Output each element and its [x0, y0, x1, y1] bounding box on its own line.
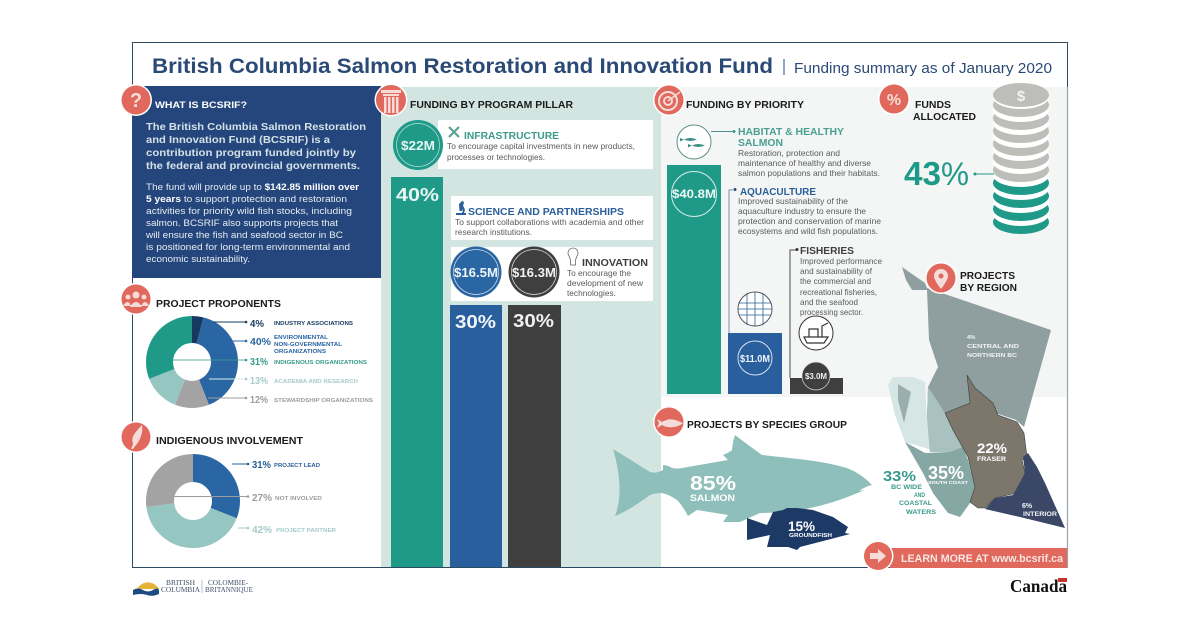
legend: environmental organizations: 40%: [250, 336, 272, 348]
legend: environmental organizations: ENVIRONMENTAL: [274, 335, 328, 341]
bar: aquaculture: $11.0M: [740, 354, 770, 365]
text: intro paragraph: contribution program funded jointly by: [146, 147, 356, 159]
icon: salmon pair: [677, 125, 711, 159]
bar: aquaculture: [728, 333, 782, 394]
icon: percent: [878, 83, 910, 115]
text: fund description: is positioned for long-term environmental and: [146, 242, 350, 252]
panel: funding by priority background: [661, 87, 1067, 397]
bar: habitat: [667, 165, 721, 394]
icon: feather: [120, 421, 152, 453]
icon: arrow: [862, 540, 894, 572]
icon: light bulb: [568, 248, 578, 265]
label: central and northern BC: CENTRAL AND: [967, 344, 1019, 350]
badge: 16.3 million: [508, 246, 560, 298]
icon: people: [120, 283, 152, 315]
chart: proponents donut: [160, 330, 224, 394]
label: fraser: 22%: [977, 440, 1008, 456]
text: aquaculture: Improved sustainability of the: [738, 196, 848, 206]
text: fisheries: Improved performance: [800, 256, 882, 266]
text: fisheries: processing sector.: [800, 307, 863, 317]
text: habitat and healthy salmon: SALMON: [738, 138, 783, 149]
bar: science 30%: [450, 305, 502, 567]
label: BC wide and coastal waters: AND: [914, 492, 925, 499]
logo: British Columbia: [133, 578, 253, 596]
heading: indigenous involvement: INDIGENOUS INVOLVEMENT: [156, 435, 304, 447]
legend: industry associations: 4%: [250, 318, 265, 330]
region: fraser: [945, 375, 1027, 508]
icon: map pin: [925, 262, 957, 294]
badge: 22 million: [393, 120, 443, 170]
text: intro paragraph: and Innovation Fund (BCSRIF) is a: [146, 134, 330, 146]
text: intro paragraph: [146, 121, 366, 172]
panel: what is BCSRIF: [120, 84, 381, 278]
label: south coast: 35%: [928, 463, 964, 483]
label: 15% groundfish: GROUNDFISH: [789, 533, 832, 539]
text: habitat and healthy salmon: HABITAT & HEALTHY: [738, 127, 844, 138]
label: 85% salmon: SALMON: [690, 493, 735, 503]
illustration: groundfish: [747, 508, 850, 550]
text: habitat and healthy salmon: salmon populations and their habitats.: [738, 168, 880, 178]
icon: fishing boat: [799, 316, 833, 350]
icon: microscope: [456, 201, 466, 215]
legend: project partner: 42%: [252, 524, 273, 536]
text: fund description: The fund will provide up to $142.85 million over: [146, 182, 360, 192]
label: 85% salmon: [690, 473, 736, 503]
heading: project proponents: PROJECT PROPONENTS: [156, 298, 281, 310]
bar: innovation 30%: 30%: [513, 311, 554, 331]
heading: what is BCSRIF: WHAT IS BCSRIF?: [155, 100, 247, 111]
text: fund description: [145, 182, 360, 264]
connector: habitat: [711, 130, 733, 132]
label: south coast: SOUTH COAST: [928, 480, 968, 485]
legend: stewardship organizations: STEWARDSHIP ORGANIZATIONS: [274, 398, 373, 404]
frame: [132, 42, 1068, 568]
legend: not involved: NOT INVOLVED: [275, 496, 322, 502]
panel: projects by region: [883, 262, 1065, 528]
panel: project proponents: [120, 283, 373, 406]
logo: Canada wordmark: Canada: [1010, 576, 1067, 596]
text: science description: research institutions.: [455, 227, 532, 237]
call to action: learn more: [862, 540, 1067, 572]
text: fund description: salmon. BCSRIF also supports projects that: [146, 218, 339, 228]
text: wordmark: COLOMBIE-: [208, 578, 248, 587]
text: infrastructure description: [447, 141, 635, 162]
icon: BC sun: [133, 582, 159, 596]
right border: [1066, 87, 1068, 567]
title: British Columbia Salmon Restoration and Innovation Fund: [152, 55, 773, 78]
label: 85% salmon: 85%: [690, 473, 736, 495]
text: innovation description: To encourage the: [567, 268, 631, 278]
text: aquaculture: protection and conservation of marine: [738, 216, 881, 226]
legend: environmental organizations: ORGANIZATIONS: [274, 349, 326, 355]
legend: academia and research: ACADEMIA AND RESEARCH: [274, 379, 358, 385]
label: 15% groundfish: 15%: [788, 518, 816, 534]
icon: target: [653, 84, 685, 116]
region: BC wide and coastal waters: [888, 377, 932, 450]
text: fisheries: [796, 245, 882, 317]
label: fraser: FRASER: [977, 457, 1007, 463]
text: aquaculture: [734, 186, 881, 236]
text: habitat and healthy salmon: Restoration, protection and: [738, 148, 840, 158]
panel: funds allocated: [878, 83, 1049, 234]
text: fund description: activities for priority wild fish stocks, including: [146, 206, 352, 216]
icon: question mark: ?: [130, 90, 142, 112]
callout: 43 percent: [904, 155, 994, 192]
badge: 16.5 million: $16.5M: [454, 265, 498, 280]
heading: projects by region: BY REGION: [960, 283, 1017, 294]
text: aquaculture: AQUACULTURE: [740, 186, 816, 198]
bar: infrastructure 40%: 40%: [396, 185, 439, 205]
text: wordmark: [161, 578, 253, 594]
panel: funding by program pillar: [374, 84, 653, 567]
text: science description: To support collaborations with academia and other: [455, 217, 644, 227]
island: Haida Gwaii: [898, 384, 911, 423]
label: BC wide and coastal waters: BC WIDE: [891, 484, 923, 491]
text: innovation description: technologies.: [567, 288, 616, 298]
icon: tools: [449, 127, 459, 137]
text: fund description: will ensure the fish and seafood sector in BC: [145, 230, 344, 240]
legend: project partner: PROJECT PARTNER: [276, 528, 337, 534]
icon: question mark: [120, 84, 152, 116]
region: interior: [985, 453, 1065, 528]
legend: stewardship organizations: [208, 394, 373, 406]
legend: indigenous organizations: 31%: [250, 356, 269, 368]
connector: aquaculture: [729, 190, 733, 333]
bar: habitat: $40.8M: [672, 189, 716, 201]
panel: funding by program pillar background: [381, 87, 661, 567]
heading: funds allocated: FUNDS: [915, 100, 951, 111]
title: infrastructure: INFRASTRUCTURE: [464, 130, 559, 142]
callout: 43 percent: %: [941, 156, 969, 192]
label: interior: 6%: [1022, 503, 1033, 510]
text: innovation description: development of new: [567, 278, 644, 288]
text: fund description: 5 years to support protection and restoration: [146, 194, 347, 204]
legend: indigenous organizations: INDIGENOUS ORGANIZATIONS: [274, 360, 367, 366]
heading: funds allocated: ALLOCATED: [913, 112, 976, 123]
icon: fish: [653, 406, 685, 438]
label: 15% groundfish: [788, 518, 832, 539]
label: central and northern BC: 4%: [967, 335, 975, 341]
connector: fisheries: [790, 250, 796, 378]
label: BC wide and coastal waters: WATERS: [906, 509, 937, 516]
legend: not involved: 27%: [252, 492, 273, 504]
panel: funding by priority: [653, 84, 882, 394]
legend: industry associations: INDUSTRY ASSOCIATIONS: [274, 321, 353, 327]
text: aquaculture: ecosystems and wild fish populations.: [738, 226, 878, 236]
badge: 22 million: $22M: [401, 138, 435, 153]
chart: coin stack: [993, 83, 1049, 234]
legend: environmental organizations: NON-GOVERNMENTAL: [274, 342, 342, 348]
text: innovation description: [567, 268, 644, 298]
region: south coast: [905, 442, 975, 517]
legend: indigenous organizations: [173, 356, 367, 368]
legend: project partner: [238, 524, 337, 536]
card: innovation: [450, 246, 653, 301]
icon: dollar sign: $: [1017, 88, 1026, 105]
heading: funding by priority: FUNDING BY PRIORITY: [686, 100, 804, 111]
legend: project lead: PROJECT LEAD: [274, 463, 320, 469]
legend: industry associations: [213, 318, 353, 330]
legend: not involved: [173, 492, 322, 504]
callout: 43 percent: 43: [904, 155, 941, 192]
badge: 16.3 million: $16.3M: [512, 265, 556, 280]
heading: funding by program pillar: FUNDING BY PROGRAM PILLAR: [410, 100, 574, 111]
label: central and northern BC: [967, 335, 1019, 359]
text: fisheries: the commercial and: [800, 276, 871, 286]
coastal inlets: [927, 387, 966, 452]
legend: academia and research: [209, 375, 358, 387]
label: fraser: [977, 440, 1008, 463]
heading: funds allocated: [913, 100, 976, 123]
label: BC wide and coastal waters: [883, 468, 937, 516]
label: central and northern BC: NORTHERN BC: [967, 353, 1018, 359]
text: infrastructure description: processes or technologies.: [447, 152, 545, 162]
icon: pillar: [374, 84, 408, 116]
label: BC wide and coastal waters: 33%: [883, 468, 916, 485]
text: fisheries: and the seafood: [800, 297, 858, 307]
legend: project lead: [232, 459, 320, 471]
text: wordmark: BRITISH: [166, 578, 196, 587]
mouth: [859, 485, 872, 491]
text: aquaculture: aquaculture industry to ensure the: [738, 206, 866, 216]
text: intro paragraph: the federal and provincial governments.: [146, 160, 360, 172]
text: wordmark: COLUMBIA: [161, 585, 201, 594]
icon: percent: %: [887, 92, 901, 109]
region: central and northern BC: [902, 267, 1051, 452]
panel: indigenous involvement: [120, 421, 337, 536]
text: fisheries: FISHERIES: [800, 245, 854, 257]
text: wordmark: BRITANNIQUE: [205, 585, 253, 594]
bar: infrastructure 40%: [391, 177, 443, 567]
title: innovation: INNOVATION: [582, 257, 648, 269]
legend: academia and research: 13%: [250, 375, 269, 387]
title: science and partnerships: SCIENCE AND PARTNERSHIPS: [468, 206, 624, 218]
text: infrastructure description: To encourage capital investments in new products,: [447, 141, 635, 151]
text: learn more: LEARN MORE AT www.bcsrif.ca: [901, 553, 1064, 565]
text: fisheries: recreational fisheries,: [800, 287, 877, 297]
illustration: salmon: [613, 435, 872, 522]
subtitle: Funding summary as of January 2020: [794, 61, 1052, 77]
label: interior: INTERIOR: [1023, 512, 1058, 518]
card: science and partnerships: [451, 196, 653, 240]
label: interior: [1022, 503, 1058, 518]
text: fisheries: and sustainability of: [800, 266, 873, 276]
label: BC wide and coastal waters: COASTAL: [899, 500, 932, 507]
legend: project lead: 31%: [252, 459, 272, 471]
bar: innovation 30%: [508, 305, 561, 567]
heading: projects by region: PROJECTS: [960, 271, 1015, 282]
text: habitat and healthy salmon: [732, 127, 880, 178]
legend: environmental organizations: [233, 335, 342, 355]
badge: 16.5 million: [450, 246, 502, 298]
icon: fish net: [738, 292, 772, 326]
heading: projects by region: [960, 271, 1017, 294]
panel: projects by species group: [613, 406, 872, 550]
bar: science 30%: 30%: [455, 312, 496, 332]
bar: fisheries: [790, 362, 843, 394]
heading: projects by species group: PROJECTS BY SPECIES GROUP: [687, 420, 847, 431]
legend: stewardship organizations: 12%: [250, 394, 269, 406]
text: intro paragraph: The British Columbia Salmon Restoration: [146, 121, 366, 133]
card: infrastructure: [393, 120, 653, 170]
text: science description: [455, 217, 644, 237]
text: fund description: economic sustainability.: [146, 254, 250, 264]
text: habitat and healthy salmon: maintenance of healthy and diverse: [738, 158, 871, 168]
bar: fisheries: $3.0M: [805, 372, 827, 381]
chart: involvement donut: [160, 468, 226, 534]
